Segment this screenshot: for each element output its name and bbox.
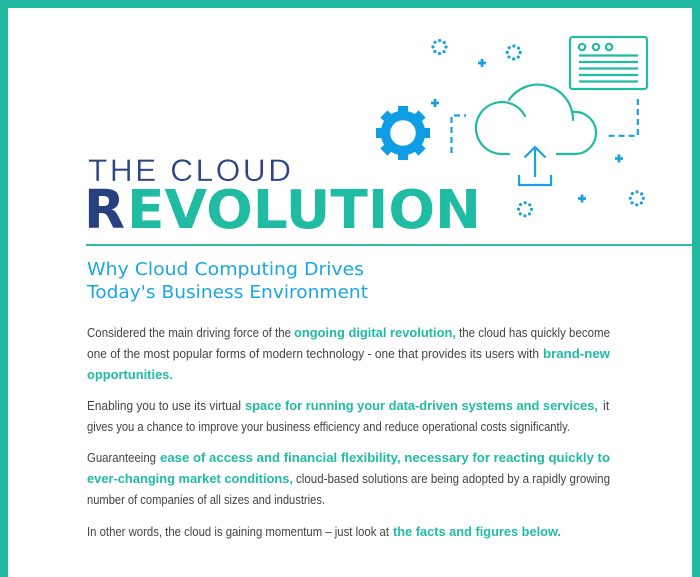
paragraph 1: Considered the main driving force of the — [87, 326, 291, 340]
paragraph 3: Guaranteeing — [87, 451, 156, 465]
paragraph 1: brand-new — [543, 347, 610, 361]
paragraph 1: one of the most popular forms of modern technology - one that provides its users with — [87, 347, 539, 361]
title: revolution: EVOLUTION — [127, 178, 481, 241]
paragraph 4: In other words, the cloud is gaining momentum – just look at — [87, 525, 389, 539]
subtitle — [86, 259, 368, 303]
divider line — [86, 244, 692, 246]
dashed connector: window to cloud — [606, 99, 638, 136]
decorative dotted circles — [433, 40, 643, 216]
paragraph 2: space for running your data-driven systems and services, — [245, 399, 598, 413]
paragraph 4: the facts and figures below. — [393, 525, 561, 539]
paragraph 3: ever-changing market conditions, — [87, 472, 293, 486]
paragraph 3: number of companies of all sizes and industries. — [87, 493, 325, 507]
paragraph 1: opportunities. — [87, 368, 173, 382]
decorative plus signs — [431, 59, 623, 202]
body text — [87, 326, 610, 539]
subtitle: Today's Business Environment — [86, 282, 368, 303]
paragraph 3 — [87, 451, 610, 507]
title: revolution: R — [84, 178, 125, 241]
icon: upload arrow — [519, 147, 551, 185]
paragraph 1 — [87, 326, 610, 382]
icon: cloud outline — [476, 85, 596, 154]
paragraph 2: it — [603, 399, 610, 413]
icon: gear — [376, 106, 430, 160]
paragraph 2: Enabling you to use its virtual — [87, 399, 241, 413]
paragraph 3: cloud-based solutions are being adopted by a rapidly growing — [296, 472, 610, 486]
dashed connector: gear to cloud — [452, 116, 466, 153]
icon: browser window — [570, 37, 647, 89]
paragraph 1: the cloud has quickly become — [459, 326, 610, 340]
paragraph 3: ease of access and financial flexibility, necessary for reacting quickly to — [160, 451, 610, 465]
paragraph 2: gives you a chance to improve your business efficiency and reduce operational costs significantly. — [87, 420, 570, 434]
paragraph 1: ongoing digital revolution, — [294, 326, 456, 340]
paragraph 2 — [87, 399, 610, 434]
subtitle: Why Cloud Computing Drives — [87, 259, 364, 280]
title: the cloud: THE CLOUD — [88, 152, 291, 188]
